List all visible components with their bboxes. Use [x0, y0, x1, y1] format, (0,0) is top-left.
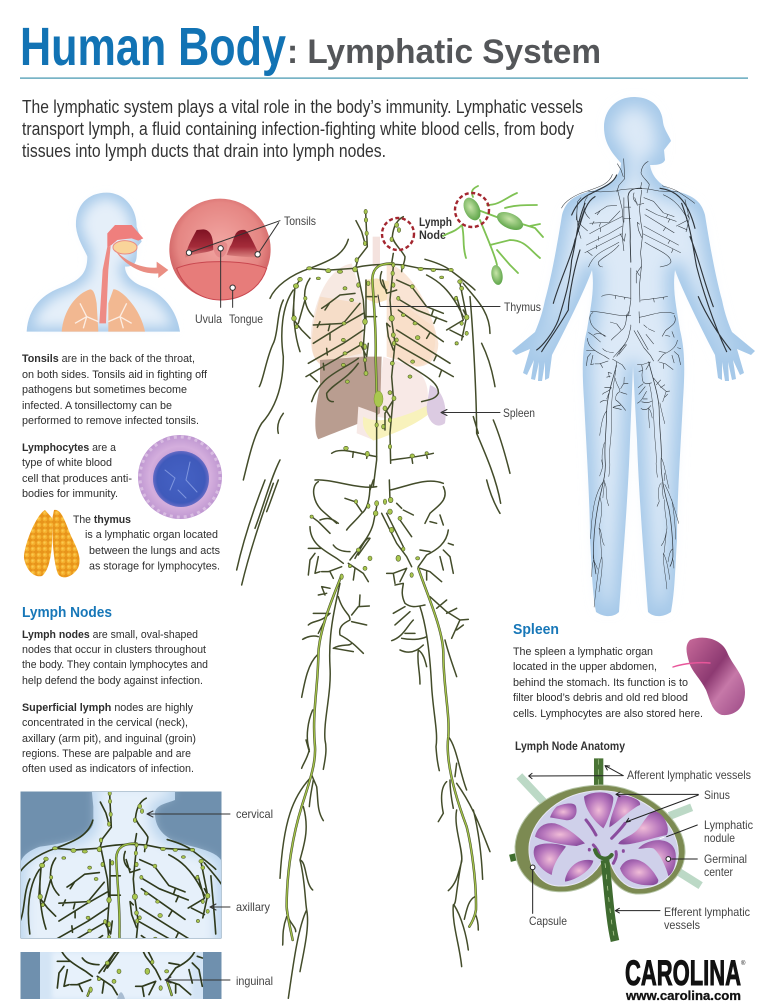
heading: Spleen: Spleen	[513, 621, 559, 638]
efferent vessel	[595, 850, 615, 941]
intro text: The lymphatic system plays a vital role in the body’s immunity. Lymphatic vessels	[22, 96, 583, 117]
label: Uvula: Uvula	[195, 313, 222, 326]
title	[20, 17, 601, 77]
arrow to throat	[115, 250, 168, 278]
text: superficial lymph: concentrated in the cervical (neck),	[22, 717, 188, 729]
diagram: lymph node anatomy	[510, 758, 701, 941]
label: Germinal center: center	[704, 866, 733, 879]
illustration: enlarged lymph node branches	[443, 186, 543, 286]
logo: Carolina: www.carolina.com	[625, 988, 741, 1003]
text: lymphocytes: cell that produces anti-	[22, 473, 132, 485]
label: Lymph Node	[419, 215, 452, 242]
text: tonsils: pathogens but sometimes become	[22, 384, 187, 396]
lymph node highlight circle	[382, 218, 414, 250]
panel: inguinal inset	[20, 952, 222, 999]
text: superficial lymph: regions. These are palpable and are	[22, 748, 191, 760]
heading: Lymph Nodes: Lymph Nodes	[22, 604, 112, 621]
text: thymus: as storage for lymphocytes.	[89, 560, 220, 572]
text: tonsils: Tonsils are in the back of the throat,	[22, 353, 195, 365]
label: Lymphatic nodule	[704, 819, 753, 845]
text: tonsils: on both sides. Tonsils aid in fighting off	[22, 369, 208, 381]
text: spleen	[513, 646, 703, 720]
heading: Lymph Node Anatomy: Lymph Node Anatomy	[515, 741, 626, 753]
label: Efferent lymphatic vessels: Efferent lymphatic	[664, 906, 750, 919]
text: superficial lymph: Superficial lymph nodes are highly	[22, 702, 193, 714]
spleen leader	[441, 410, 500, 416]
text: lymph nodes: Lymph nodes are small, oval-shaped	[22, 629, 198, 641]
label: Tongue: Tongue	[229, 313, 263, 326]
text: spleen: cells. Lymphocytes are also stored here.	[513, 708, 703, 720]
text: lymph nodes: nodes that occur in clusters throughout	[22, 644, 207, 656]
text: thymus: between the lungs and acts	[89, 545, 220, 557]
arrow: axillary	[210, 904, 230, 910]
text: thymus: The thymus	[73, 514, 131, 526]
text: tonsils: infected. A tonsillectomy can be	[22, 400, 172, 412]
label: Lymphatic nodule: Lymphatic	[704, 819, 753, 832]
label: inguinal: inguinal	[236, 975, 273, 988]
throat circle	[169, 199, 280, 307]
text: thymus: is a lymphatic organ located	[85, 529, 218, 541]
arrow: inguinal	[165, 977, 230, 983]
label: Afferent lymphatic vessels: Afferent lymphatic vessels	[627, 769, 751, 782]
logo: Carolina: ®	[741, 960, 746, 967]
intro text	[22, 96, 583, 161]
label: Lymphatic nodule: nodule	[704, 832, 735, 845]
capsule	[515, 785, 685, 894]
organs	[311, 237, 446, 441]
text: tonsils: performed to remove infected tonsils.	[22, 415, 199, 427]
label: Lymph Node: Node	[419, 228, 446, 242]
text: superficial lymph	[22, 702, 196, 775]
blue body with lymphatic vessels	[512, 97, 755, 616]
lobes	[534, 792, 676, 885]
text: tonsils	[22, 353, 208, 427]
text: spleen: located in the upper abdomen,	[513, 661, 657, 673]
text: lymph nodes	[22, 629, 208, 687]
intro text: tissues into lymph ducts that drain into lymph nodes.	[22, 140, 386, 161]
label: Efferent lymphatic vessels	[664, 906, 750, 932]
label: Lymph Node: Lymph	[419, 215, 452, 229]
text: spleen: filter blood’s debris and old red blood	[513, 692, 688, 704]
airway	[99, 225, 143, 323]
label: cervical: cervical	[236, 808, 273, 821]
text: lymphocytes	[22, 442, 132, 500]
title: : Lymphatic System	[287, 33, 601, 71]
icon: lymphocyte cell	[138, 435, 222, 519]
label: Germinal center: Germinal	[704, 853, 747, 866]
lungs	[62, 289, 145, 332]
text: superficial lymph: axillary (arm pit), and inguinal (groin)	[22, 733, 196, 745]
text: lymph nodes: help defend the body against infection.	[22, 675, 203, 687]
text: lymphocytes: bodies for immunity.	[22, 488, 118, 500]
label: Capsule: Capsule	[529, 915, 567, 928]
text: spleen: behind the stomach. Its function is to	[513, 677, 688, 689]
icon: thymus organ	[24, 510, 80, 577]
text: lymph nodes: the body. They contain lymphocytes and	[22, 659, 208, 671]
central lymphatic figure	[237, 209, 510, 998]
afferent vessels	[510, 758, 701, 886]
text: spleen: The spleen a lymphatic organ	[513, 646, 653, 658]
label: Sinus: Sinus	[704, 789, 730, 802]
logo: Carolina	[625, 954, 746, 1003]
text: lymphocytes: Lymphocytes are a	[22, 442, 117, 454]
text: lymphocytes: type of white blood	[22, 457, 112, 469]
label: Spleen: Spleen	[503, 407, 535, 420]
label: Efferent lymphatic vessels: vessels	[664, 919, 700, 932]
label: axillary: axillary	[236, 901, 270, 914]
thymus leader	[378, 295, 500, 306]
title: Human Body	[20, 17, 286, 77]
intro text: transport lymph, a fluid containing infection-fighting white blood cells, from body	[22, 118, 575, 139]
arrow: cervical	[147, 811, 230, 817]
icon: spleen organ	[673, 638, 745, 715]
leaders	[529, 766, 698, 913]
figure: head with throat and lungs	[27, 193, 280, 332]
label: Tonsils: Tonsils	[284, 215, 316, 228]
label: Thymus: Thymus	[504, 301, 541, 314]
panel: cervical and axillary inset	[20, 792, 222, 938]
text: thymus	[73, 514, 220, 572]
text: superficial lymph: often used as indicators of infection.	[22, 763, 194, 775]
sinus	[529, 791, 678, 888]
label: Germinal center	[704, 853, 747, 879]
